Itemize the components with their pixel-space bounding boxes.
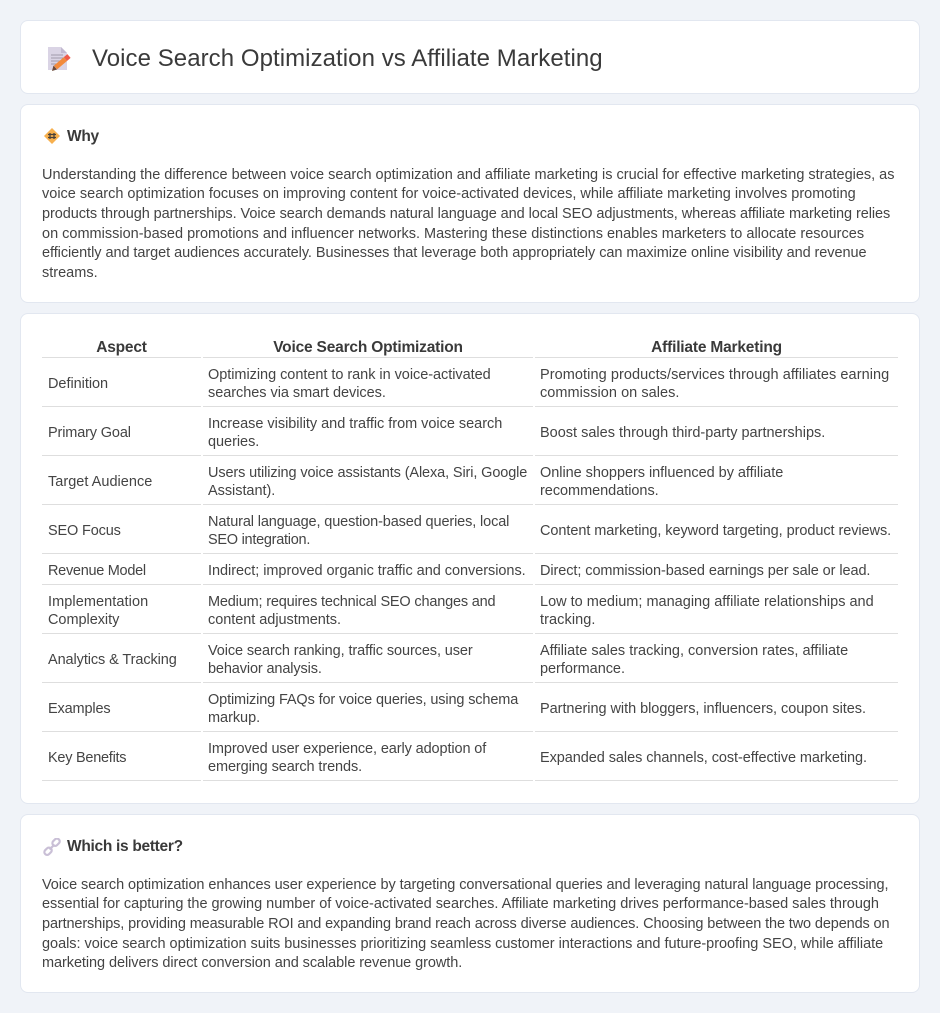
- row: primary goal: Primary Goal: [48, 425, 131, 441]
- row: analytics and tracking: Voice search ranking, traffic sources, user: [208, 643, 473, 659]
- row: target audience: Users utilizing voice assistants (Alexa, Siri, Google: [208, 465, 527, 481]
- row: implementation complexity: Complexity: [48, 612, 119, 628]
- text block: why paragraph: products through partnerships. Voice search demands natural language and local SEO adjustments, whereas affiliate marketing relies: [42, 206, 890, 222]
- row: seo focus: SEO Focus: [48, 523, 121, 539]
- text block: why paragraph: [42, 167, 894, 281]
- row: definition: Definition: [48, 376, 108, 392]
- text block: which is better paragraph: partnerships, providing measurable ROI and expanding brand reach across diverse audiences. Choosing between the two depends on: [42, 916, 889, 932]
- text block: which is better paragraph: goals: voice search optimization suits businesses prioritizing seamless customer interactions and future-proofing SEO, while affiliate: [42, 936, 883, 952]
- row: implementation complexity: Implementation: [48, 594, 148, 610]
- row: implementation complexity: tracking.: [540, 612, 596, 628]
- row: analytics and tracking: Affiliate sales tracking, conversion rates, affiliate: [540, 643, 848, 659]
- row: definition: Optimizing content to rank in voice-activated: [208, 367, 491, 383]
- row: primary goal: Increase visibility and traffic from voice search: [208, 416, 502, 432]
- row: target audience: [48, 465, 783, 499]
- row: revenue model: Revenue Model: [48, 563, 146, 579]
- row: analytics and tracking: performance.: [540, 661, 625, 677]
- panel: comparison table: [20, 313, 920, 804]
- row: implementation complexity: Medium; requires technical SEO changes and: [208, 594, 495, 610]
- row: primary goal: queries.: [208, 434, 259, 450]
- row: definition: [48, 367, 889, 401]
- text block: why paragraph: Understanding the difference between voice search optimization and affiliate marketing is crucial for effective marketing strategies, as: [42, 167, 894, 183]
- row: target audience: Assistant).: [208, 483, 275, 499]
- row: examples: Optimizing FAQs for voice queries, using schema: [208, 692, 518, 708]
- icon: document with pencil: [48, 47, 71, 71]
- row: seo focus: [48, 514, 891, 548]
- row: seo focus: Natural language, question-based queries, local: [208, 514, 509, 530]
- row: key benefits: emerging search trends.: [208, 759, 362, 775]
- table header row: Affiliate Marketing: [651, 339, 782, 356]
- row: examples: Examples: [48, 701, 110, 717]
- table header row: Aspect: [96, 339, 147, 356]
- row: definition: Promoting products/services through affiliates earning: [540, 367, 889, 383]
- text block: which is better paragraph: marketing delivers direct conversion and scalable revenue growth.: [42, 955, 462, 971]
- row: implementation complexity: Low to medium; managing affiliate relationships and: [540, 594, 874, 610]
- text block: which is better paragraph: essential for capturing the growing number of voice-activated searches. Affiliate marketing drives performance-based sales through: [42, 896, 879, 912]
- table header row: Voice Search Optimization: [273, 339, 463, 356]
- row: definition: commission on sales.: [540, 385, 680, 401]
- row: key benefits: Expanded sales channels, cost-effective marketing.: [540, 750, 867, 766]
- row: target audience: Target Audience: [48, 474, 152, 490]
- icon: link: [43, 838, 61, 856]
- heading: which is better: Which is better?: [67, 838, 183, 855]
- row: target audience: Online shoppers influenced by affiliate: [540, 465, 783, 481]
- row: analytics and tracking: Analytics & Tracking: [48, 652, 177, 668]
- icon: diamond sign: [44, 128, 60, 144]
- text block: why paragraph: efficiently and target audiences accurately. Businesses that leverage both appropriately can maximize online visibility and revenue: [42, 245, 866, 261]
- row: key benefits: Key Benefits: [48, 750, 126, 766]
- row: revenue model: [48, 563, 870, 579]
- row: analytics and tracking: behavior analysis.: [208, 661, 322, 677]
- text block: which is better paragraph: Voice search optimization enhances user experience by targeting conversational queries and leveraging natural language processing,: [42, 877, 888, 893]
- row: key benefits: Improved user experience, early adoption of: [208, 741, 486, 757]
- text block: why paragraph: on commission-based promotions and influencer networks. Mastering these distinctions enables marketers to allocate resources: [42, 226, 864, 242]
- row: target audience: recommendations.: [540, 483, 659, 499]
- heading: why: Why: [67, 128, 99, 145]
- row: examples: Partnering with bloggers, influencers, coupon sites.: [540, 701, 866, 717]
- row: revenue model: Indirect; improved organic traffic and conversions.: [208, 563, 526, 579]
- panel: why: [20, 104, 920, 303]
- text block: which is better paragraph: [42, 877, 889, 971]
- panel: which is better: [20, 814, 920, 993]
- row: examples: markup.: [208, 710, 260, 726]
- row: primary goal: [48, 416, 825, 450]
- text block: why paragraph: voice search optimization focuses on improving content for voice-activated devices, while affiliate marketing involves promoting: [42, 186, 856, 202]
- row: examples: [48, 692, 866, 726]
- table header row: [96, 339, 782, 356]
- title: Voice Search Optimization vs Affiliate Marketing: [92, 45, 603, 72]
- row: implementation complexity: content adjustments.: [208, 612, 341, 628]
- text block: why paragraph: streams.: [42, 265, 98, 281]
- row: key benefits: [48, 741, 867, 775]
- row: analytics and tracking: [48, 643, 848, 677]
- panel: title header: [20, 20, 920, 94]
- row: definition: searches via smart devices.: [208, 385, 386, 401]
- row: seo focus: SEO integration.: [208, 532, 310, 548]
- row: seo focus: Content marketing, keyword targeting, product reviews.: [540, 523, 891, 539]
- row: revenue model: Direct; commission-based earnings per sale or lead.: [540, 563, 870, 579]
- row: implementation complexity: [48, 594, 874, 628]
- row: primary goal: Boost sales through third-party partnerships.: [540, 425, 825, 441]
